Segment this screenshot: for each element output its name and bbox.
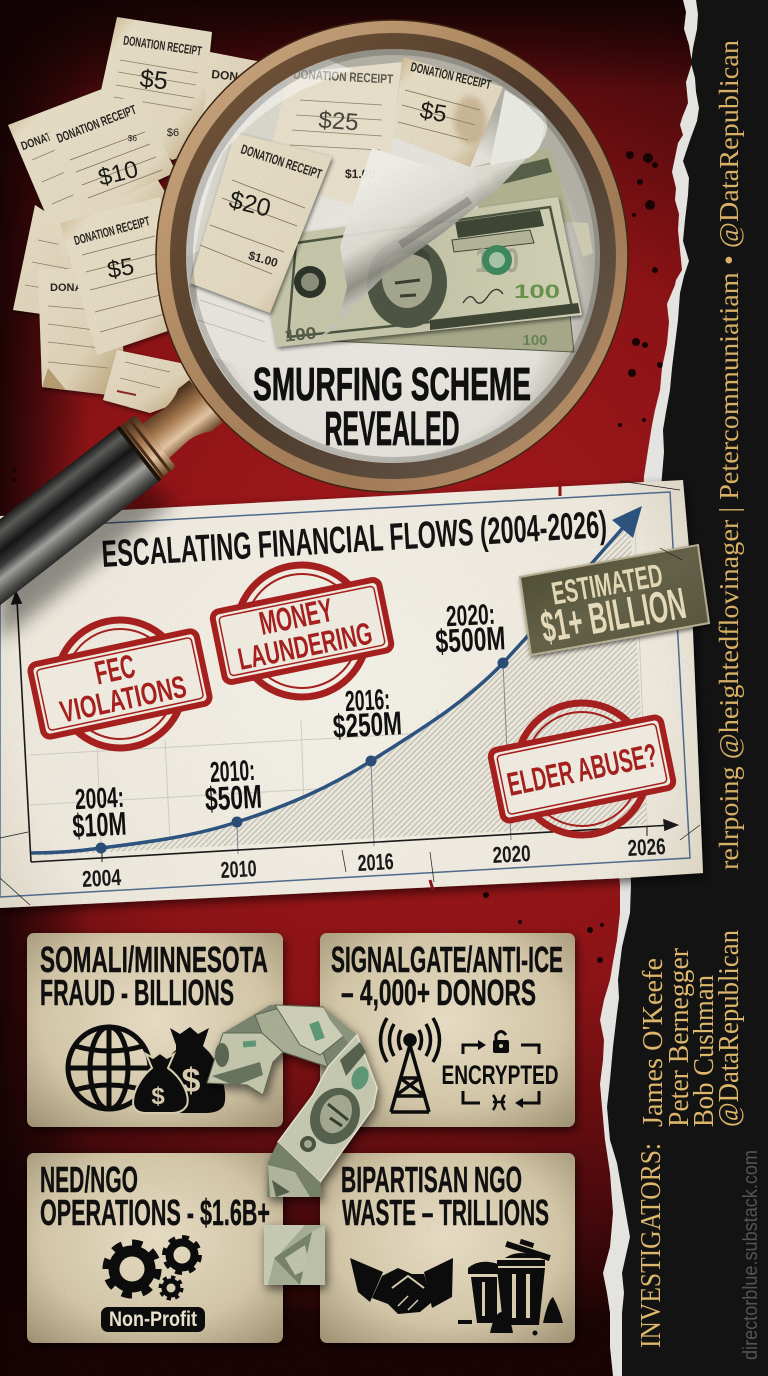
lens: receipt $20 xyxy=(190,133,332,313)
card: NED/NGO: OPERATIONS - $1.6B+ xyxy=(40,1192,270,1233)
receipt: left xyxy=(8,89,170,257)
chart value labels: 2004: xyxy=(74,782,125,816)
chart year labels: 2020 xyxy=(492,840,531,868)
icon: money bags: $ xyxy=(182,1062,201,1100)
side credit line: relrpoing @heightedflovinager | Petercommuniatiam • @DataRepublican xyxy=(714,39,744,870)
chart grid xyxy=(30,530,660,850)
chart paper panel xyxy=(0,480,709,908)
chart year labels: 2004 xyxy=(81,864,122,892)
magnifying lens xyxy=(156,20,628,492)
money question mark xyxy=(207,1005,377,1285)
lens: back bills xyxy=(310,147,593,352)
lens: dollar bill: 100 xyxy=(475,242,519,280)
lens: dollar bill xyxy=(270,197,582,347)
lens: back bills: 100 xyxy=(522,332,548,349)
stamp: money laundering xyxy=(206,549,398,713)
question mark folds xyxy=(207,1005,377,1197)
lens: inner rim shadow xyxy=(190,52,598,460)
investigators credits: Peter Bernegger xyxy=(664,947,695,1127)
card: Signalgate: SIGNALGATE/ANTI-ICE xyxy=(331,939,563,980)
receipt: left: DONATION RECEIPT xyxy=(19,109,109,153)
lens title: REVEALED xyxy=(324,403,460,456)
receipt: $10: $6 xyxy=(128,134,137,143)
lens: receipt $5: DONATION RECEIPT xyxy=(409,59,493,92)
lens: receipt $20: DONATION RECEIPT xyxy=(239,142,324,182)
receipt: $5 front xyxy=(60,197,200,355)
receipt: bottom xyxy=(103,350,200,413)
lens: bottom left faint receipt xyxy=(194,286,265,362)
stamp: FEC violations: FEC xyxy=(91,647,138,692)
lens: dollar bill: 100 xyxy=(514,282,560,303)
receipt: $5 front: $5 xyxy=(105,253,136,284)
icon: encrypted cycle xyxy=(442,1032,558,1110)
chart value labels: 2016: xyxy=(344,684,391,718)
badge: non-profit: Non-Profit xyxy=(109,1308,197,1331)
card: Bipartisan NGO xyxy=(320,1153,575,1343)
icon: radio tower xyxy=(380,1018,440,1112)
card: Signalgate xyxy=(320,933,575,1127)
icon: money bags xyxy=(133,1027,225,1113)
receipt: $10 xyxy=(47,92,176,215)
icon: handshake xyxy=(350,1258,453,1314)
lens title: SMURFING SCHEME xyxy=(253,358,531,410)
chart value labels: $10M xyxy=(71,805,127,844)
receipt: behind right: DONAT xyxy=(211,67,254,85)
chart year labels xyxy=(81,833,666,892)
chart axes xyxy=(12,592,677,862)
icon: money bags: $ xyxy=(151,1083,165,1110)
receipt: bottom left: DONA xyxy=(50,282,82,294)
receipt: top $5: $5 xyxy=(139,65,169,95)
lens: rim xyxy=(156,20,628,492)
lens: receipt $20: $1.00 xyxy=(247,248,280,270)
lens: glass glare xyxy=(187,60,352,285)
receipt: behind right xyxy=(190,52,262,190)
card: Bipartisan NGO: BIPARTISAN NGO xyxy=(341,1159,522,1200)
icon: trash bins xyxy=(458,1239,563,1336)
icon: encrypted cycle: ENCRYPTED xyxy=(442,1060,558,1090)
investigators credits: Bob Cushman xyxy=(689,975,720,1127)
receipt: $5 front: DONATION RECEIPT xyxy=(72,213,151,248)
chart value labels: $50M xyxy=(204,778,263,817)
card: NED/NGO xyxy=(27,1153,283,1343)
magnifying glass handle xyxy=(0,375,227,660)
sign: estimated $1+ billion: ESTIMATED xyxy=(549,557,665,612)
icon: gears xyxy=(106,1238,199,1298)
torn black strip: bottom xyxy=(600,540,768,1376)
stamp: money laundering: LAUNDERING xyxy=(235,615,375,677)
chart value labels: $500M xyxy=(434,619,506,660)
lens: curled page xyxy=(313,90,547,343)
receipt: $10: DONATION RECEIPT xyxy=(54,102,138,146)
question mark dot xyxy=(264,1225,325,1285)
receipt: top $5: $6 xyxy=(167,127,179,139)
torn black strip: top xyxy=(640,0,768,560)
lens: receipt $25: DONATION RECEIPT xyxy=(293,66,394,87)
handle shadow on paper xyxy=(0,470,175,640)
investigators credits: INVESTIGATORS: xyxy=(636,1143,667,1348)
receipt: top $5 xyxy=(100,17,212,160)
card: Somali/Minnesota: FRAUD - BILLIONS xyxy=(40,972,234,1013)
chart value labels xyxy=(71,599,506,844)
lens: receipt $25 xyxy=(270,62,402,205)
lens: receipt $25: $1.00 xyxy=(345,167,375,181)
lens: receipt $20: $20 xyxy=(226,186,274,223)
chart year labels: 2016 xyxy=(357,848,394,876)
card: Somali/Minnesota xyxy=(27,933,283,1127)
chart value labels: $250M xyxy=(332,704,403,745)
chart year labels: 2010 xyxy=(220,855,257,883)
source url: directorblue.substack.com xyxy=(740,1150,762,1360)
card: Somali/Minnesota: SOMALI/MINNESOTA xyxy=(40,939,268,980)
lens title xyxy=(253,358,531,456)
card: Bipartisan NGO: WASTE – TRILLIONS xyxy=(342,1192,549,1233)
stamp: FEC violations xyxy=(24,604,216,764)
receipt: bottom left xyxy=(38,267,125,397)
icon: globe xyxy=(68,1027,150,1109)
paper cracks and drips xyxy=(0,480,700,905)
stamp: money laundering: MONEY xyxy=(256,591,336,642)
stamp: elder abuse: ELDER ABUSE? xyxy=(504,736,660,803)
chart curve xyxy=(31,506,642,854)
card: Signalgate: – 4,000+ DONORS xyxy=(341,972,536,1013)
lens: dollar bill: 100 xyxy=(284,323,317,346)
lens: receipt $5 xyxy=(393,57,503,167)
lens: faint paper under glare xyxy=(187,78,289,256)
stamp: elder abuse xyxy=(484,687,680,851)
card: NED/NGO: NED/NGO xyxy=(40,1159,138,1200)
sign: estimated $1+ billion xyxy=(520,545,709,655)
lens: receipt $5: $5 xyxy=(418,97,449,128)
investigators credits: @DataRepublican xyxy=(714,930,745,1127)
investigators credits: James O'Keefe xyxy=(638,958,669,1127)
lens: receipt $25: $25 xyxy=(318,107,359,136)
chart value labels: 2020: xyxy=(445,599,496,633)
chart drop lines xyxy=(237,663,511,854)
receipts pile xyxy=(8,17,262,413)
chart value labels: 2010: xyxy=(209,755,256,789)
receipt: $10: $10 xyxy=(95,156,141,192)
receipt: top $5: DONATION RECEIPT xyxy=(122,33,203,58)
chart hatch area xyxy=(31,520,647,856)
stamp: FEC violations: VIOLATIONS xyxy=(57,669,189,730)
chart year labels: 2026 xyxy=(627,833,666,861)
ink splatters xyxy=(12,151,663,963)
investigators credits xyxy=(636,930,745,1348)
receipt: back lower left xyxy=(13,205,120,330)
